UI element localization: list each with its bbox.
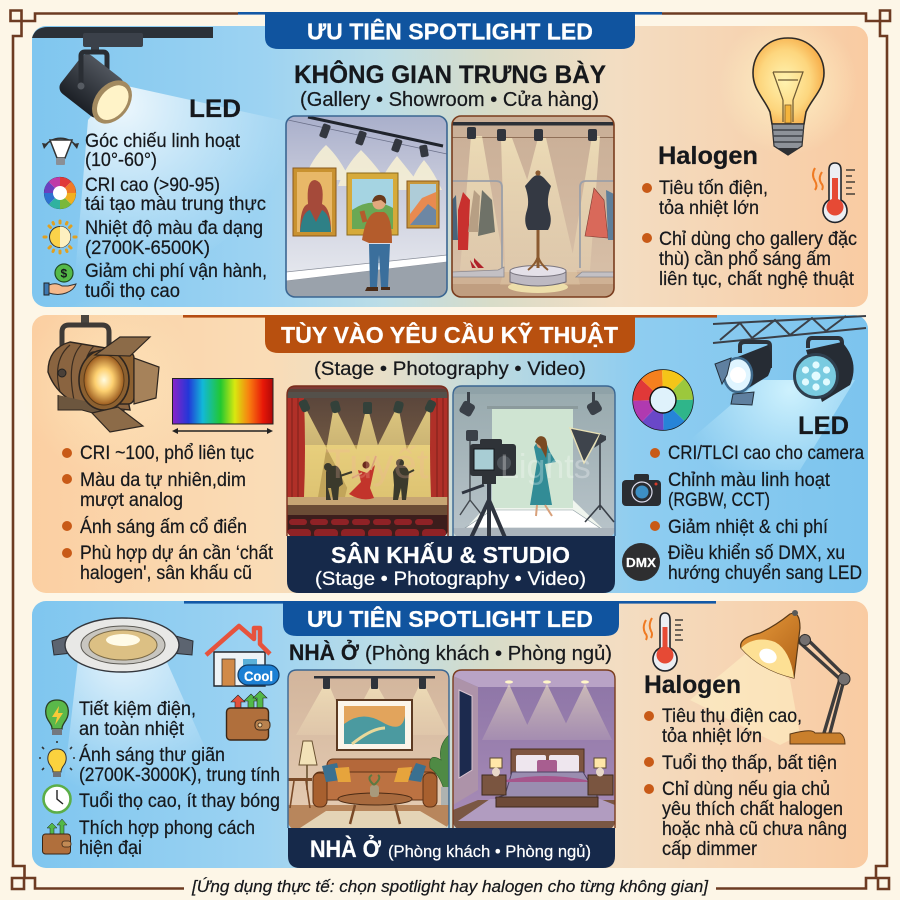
label: Halogen home: Halogen xyxy=(644,671,741,699)
text: lifespan: Tuổi thọ cao, ít thay bóng xyxy=(79,791,280,812)
list: halogen drawbacks home: Tiêu thụ điện cao, xyxy=(662,706,802,727)
header banner top xyxy=(238,12,662,49)
text: beam angle xyxy=(85,131,241,171)
text: energy saving: an toàn nhiệt xyxy=(79,719,185,740)
illustration: living room xyxy=(288,670,449,830)
icon: thermometer xyxy=(813,163,855,222)
heading: exhibition space: KHÔNG GIAN TRƯNG BÀY xyxy=(294,59,606,89)
list: halogen drawbacks gallery: liên tục, chất nghệ thuật xyxy=(659,269,855,290)
text: warm light: Ánh sáng thư giãn xyxy=(79,745,225,766)
list: LED benefits stage xyxy=(650,443,864,584)
list: halogen drawbacks gallery: thù) cần phổ sáng ấm xyxy=(659,249,831,270)
icon: hand with coin xyxy=(44,264,76,295)
icon: track spotlight xyxy=(32,27,213,131)
header banner bottom: ƯU TIÊN SPOTLIGHT LED xyxy=(307,605,593,632)
text: beam angle: Góc chiếu linh hoạt xyxy=(85,131,241,152)
list: LED benefits stage: hướng chuyển sang LED xyxy=(668,563,862,584)
icon: energy bulb xyxy=(46,700,68,735)
icon: clock xyxy=(44,786,70,812)
icon: colour wheel xyxy=(633,370,693,430)
text: modern style: hiện đại xyxy=(79,838,142,859)
footer note: [Ứng dụng thực tế: chọn spotlight hay halogen cho từng không gian] xyxy=(191,877,709,896)
text: modern style: Thích hợp phong cách xyxy=(79,818,255,839)
list: halogen drawbacks gallery xyxy=(642,178,857,290)
list: halogen benefits stage: Phù hợp dự án cần ‘chất xyxy=(80,543,274,564)
heading: home: (Phòng khách • Phòng ngủ) xyxy=(365,643,612,665)
list: LED benefits stage: Điều khiển số DMX, xu xyxy=(668,543,845,564)
list: halogen drawbacks gallery: Tiêu tốn điện, xyxy=(659,178,768,199)
caption: stage and studio: SÂN KHẤU & STUDIO xyxy=(331,541,570,568)
illustration: photo studio: Lights xyxy=(500,448,591,486)
illustration: photo studio xyxy=(453,386,615,540)
icon: hand with coin: $ xyxy=(60,266,68,280)
icon: DMX badge xyxy=(622,543,660,581)
text: energy saving: Tiết kiệm điện, xyxy=(79,699,196,720)
header banner top: ƯU TIÊN SPOTLIGHT LED xyxy=(307,18,593,44)
chart: colour spectrum xyxy=(172,378,273,434)
heading: exhibition space: (Gallery • Showroom • Cửa hàng) xyxy=(300,89,599,111)
list: halogen benefits stage: Màu da tự nhiên,dim xyxy=(80,470,246,491)
heading: exhibition space xyxy=(294,59,606,111)
icon: wallet with rising arrows large xyxy=(226,691,270,740)
list: halogen drawbacks home: cấp dimmer xyxy=(662,839,758,860)
icon: DMX badge: DMX xyxy=(626,555,656,570)
text: energy saving xyxy=(79,699,196,740)
list: halogen drawbacks home: hoặc nhà cũ chưa nâng xyxy=(662,819,847,840)
caption: stage and studio xyxy=(287,536,615,593)
list: halogen drawbacks home: yêu thích chất halogen xyxy=(662,799,843,820)
illustration: art gallery xyxy=(286,116,447,297)
beam of LED lights xyxy=(690,380,855,470)
beam of desk lamp xyxy=(690,650,800,745)
illustration: bedroom xyxy=(453,670,615,830)
caption: home: NHÀ Ở xyxy=(310,834,381,863)
list: halogen benefits stage: CRI ~100, phổ liên tục xyxy=(80,443,254,464)
list: LED benefits stage: CRI/TLCI cao cho camera xyxy=(668,443,864,464)
heading: home: NHÀ Ở xyxy=(289,640,359,665)
text: colour temperature: Nhiệt độ màu đa dạng xyxy=(85,218,263,239)
icon: home with cool badge: Cool xyxy=(244,669,273,684)
header banner middle: TÙY VÀO YÊU CẦU KỸ THUẬT xyxy=(281,321,618,348)
beam of fresnel xyxy=(20,295,200,475)
frame: gallery picture xyxy=(286,116,447,297)
list: halogen benefits stage: mượt analog xyxy=(80,490,183,511)
text: colour rendering: CRI cao (>90-95) xyxy=(85,175,220,196)
label: LED: LED xyxy=(189,95,241,123)
list: halogen drawbacks home: Tuổi thọ thấp, bất tiện xyxy=(662,753,837,774)
list: halogen benefits stage: Ánh sáng ấm cổ điển xyxy=(80,517,247,538)
list: halogen drawbacks home: tỏa nhiệt lớn xyxy=(662,726,762,747)
text: colour temperature: (2700K-6500K) xyxy=(85,238,210,259)
panel: gallery and showroom xyxy=(32,12,868,312)
frame: home pictures xyxy=(288,670,615,828)
header banner middle xyxy=(183,315,717,353)
icon: home with cool badge xyxy=(206,626,279,686)
panel: stage and studio xyxy=(20,295,868,593)
list: LED benefits stage: (RGBW, CCT) xyxy=(668,490,770,511)
list: halogen drawbacks gallery: tỏa nhiệt lớn xyxy=(659,198,759,219)
icon: beam angle xyxy=(42,138,79,165)
panel: home xyxy=(32,601,868,868)
label: Halogen: Halogen xyxy=(658,142,758,170)
icon: truss with LED stage lights xyxy=(713,316,866,405)
illustration: fashion showroom xyxy=(452,116,614,297)
icon: warm bulb xyxy=(39,741,75,777)
text: running cost: tuổi thọ cao xyxy=(85,281,180,302)
illustration: theatre stage xyxy=(287,386,448,538)
header banner bottom xyxy=(184,601,716,636)
list: halogen benefits stage: halogen', sân khấu cũ xyxy=(80,563,252,584)
text: running cost: Giảm chi phí vận hành, xyxy=(85,261,267,282)
heading: stage subtitle: (Stage • Photography • Video) xyxy=(314,359,586,380)
label: LED right: LED xyxy=(798,412,849,440)
icon: fresnel stage light xyxy=(48,315,159,432)
icon: desk lamp xyxy=(741,610,850,744)
list: LED benefits stage: Giảm nhiệt & chi phí xyxy=(668,517,829,538)
caption: home: (Phòng khách • Phòng ngủ) xyxy=(388,842,591,861)
icon: wallet small xyxy=(42,819,71,854)
illustration: theatre stage: Tuyết xyxy=(325,440,429,487)
text: colour temperature xyxy=(85,218,263,259)
caption: stage and studio: (Stage • Photography • Video) xyxy=(315,569,586,590)
icon: colour ring xyxy=(44,178,76,208)
text: modern style xyxy=(79,818,255,859)
list: halogen drawbacks home: Chỉ dùng nếu gia chủ xyxy=(662,779,830,800)
frame: showroom picture xyxy=(452,116,614,297)
text: running cost xyxy=(85,261,267,302)
list: halogen benefits stage xyxy=(62,443,274,584)
list: LED benefits stage: Chỉnh màu linh hoạt xyxy=(668,470,831,491)
beam of downlight xyxy=(60,660,235,815)
icon: camera xyxy=(622,474,661,506)
frame: stage pictures xyxy=(287,386,615,536)
beam of track light xyxy=(72,84,290,312)
icon: incandescent bulb xyxy=(718,15,858,155)
text: colour rendering xyxy=(85,175,266,215)
heading: home xyxy=(289,640,612,665)
list: halogen drawbacks gallery: Chỉ dùng cho gallery đặc xyxy=(659,229,857,250)
text: warm light: (2700K-3000K), trung tính xyxy=(79,765,280,786)
text: colour rendering: tái tạo màu trung thực xyxy=(85,194,266,215)
icon: thermometer home xyxy=(644,613,683,671)
text: beam angle: (10°-60°) xyxy=(85,150,157,171)
caption: home xyxy=(288,828,615,868)
icon: recessed downlight xyxy=(52,618,193,672)
icon: sun colour temperature xyxy=(44,221,76,253)
text: warm light xyxy=(79,745,280,786)
list: halogen drawbacks home xyxy=(644,706,847,860)
